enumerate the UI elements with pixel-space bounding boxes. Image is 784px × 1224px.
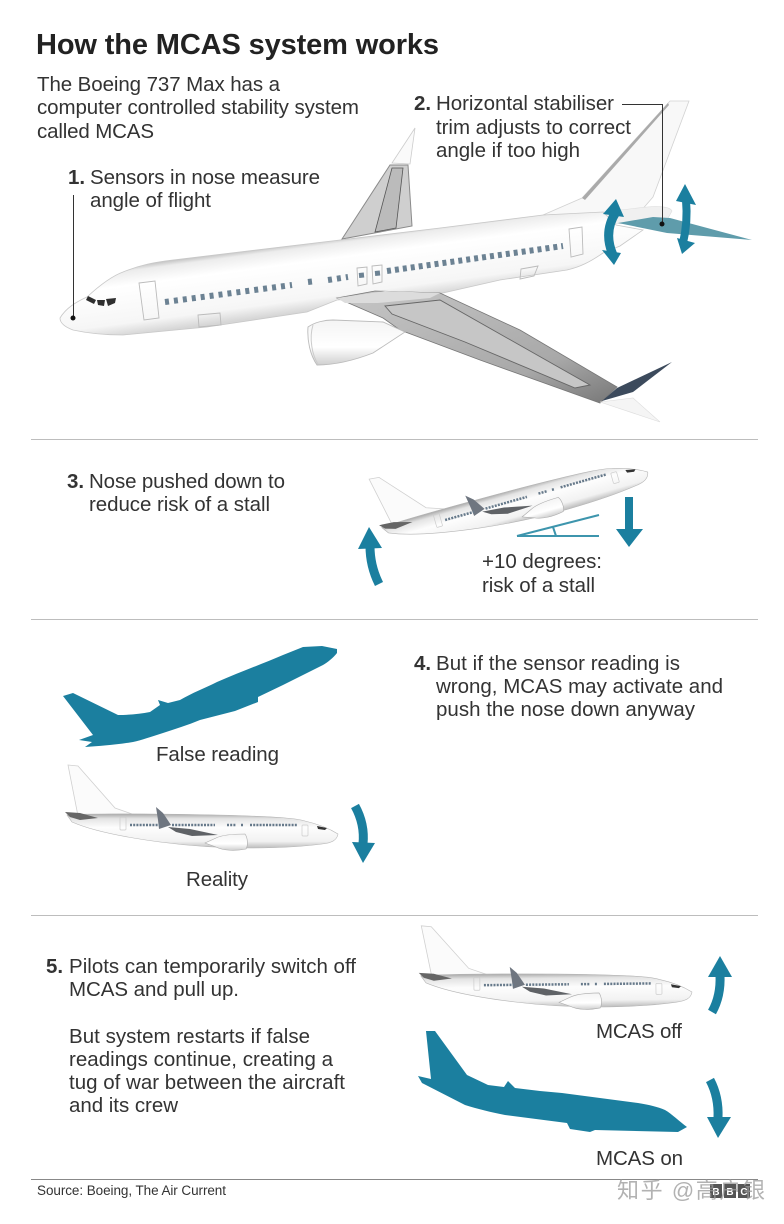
tail cone upper (603, 207, 672, 224)
winglet (600, 362, 672, 422)
step 3 text: reduce risk of a stall (89, 493, 270, 516)
nose-up aircraft (366, 406, 652, 562)
step 3 text: Nose pushed down to (89, 470, 285, 493)
step 5 text: Pilots can temporarily switch off (69, 955, 356, 978)
reality aircraft (65, 765, 338, 850)
engine (308, 320, 405, 365)
callout 2 text: angle if too high (436, 139, 580, 162)
step 3 text: 3. (67, 470, 84, 493)
far wing (342, 128, 415, 239)
divider (31, 438, 758, 440)
step 5 text: MCAS and pull up. (69, 978, 239, 1001)
main aircraft illustration (60, 101, 752, 422)
callout 2 text: trim adjusts to correct (436, 116, 631, 139)
reality label: Reality (186, 868, 249, 891)
false reading silhouette (63, 646, 337, 747)
callout 1 text: angle of flight (90, 189, 211, 212)
fuselage (60, 212, 643, 335)
horizontal stabiliser, teal (618, 217, 752, 240)
near wing (337, 291, 617, 403)
false reading label: False reading (156, 743, 279, 766)
leader line to nose sensor (70, 195, 76, 320)
MCAS on label: MCAS on (596, 1147, 683, 1170)
step 4 text (414, 652, 723, 721)
MCAS on silhouette (418, 1031, 687, 1132)
BBC logo: B (726, 1187, 734, 1198)
windows (165, 246, 563, 302)
intro text (37, 73, 359, 143)
callout 1 text: 1. (68, 166, 85, 189)
step 4 text: push the nose down anyway (436, 698, 696, 721)
leader line to stabiliser (622, 104, 664, 226)
arrow: tail up (358, 527, 382, 584)
callout 2 text: Horizontal stabiliser (436, 92, 614, 115)
step 4 text: 4. (414, 652, 431, 675)
angle label: risk of a stall (482, 574, 595, 597)
step 3 text (67, 470, 285, 516)
arrow: nose down (616, 497, 643, 547)
cockpit windows (86, 296, 116, 306)
MCAS off label: MCAS off (596, 1020, 682, 1043)
source: Source: Boeing, The Air Current (37, 1183, 226, 1198)
step 4 text: wrong, MCAS may activate and (435, 675, 723, 698)
step 5 text: But system restarts if false (69, 1025, 310, 1048)
step 5 text: 5. (46, 955, 63, 978)
arrow: MCAS on nose down (707, 1080, 731, 1138)
double arrow: stabiliser movement (676, 184, 696, 254)
angle marker (517, 515, 599, 536)
callout 2 text: 2. (414, 92, 431, 115)
footer rule (31, 1178, 758, 1180)
step 4 text: But if the sensor reading is (436, 652, 680, 675)
angle label (482, 550, 602, 597)
callout 1 text: Sensors in nose measure (90, 166, 320, 189)
BBC logo: C (740, 1187, 748, 1198)
intro text: computer controlled stability system (37, 96, 359, 119)
arrow: reality nose down (352, 806, 375, 863)
step 5 text: tug of war between the aircraft (69, 1071, 345, 1094)
step 5 text: and its crew (69, 1094, 178, 1117)
step 5 text (46, 955, 356, 1117)
BBC logo: B (712, 1187, 720, 1198)
callout 1 text (68, 166, 320, 212)
divider (31, 914, 758, 916)
MCAS off aircraft (418, 923, 692, 1011)
doors and panels (139, 227, 583, 327)
watermark: 知乎 @高户银 (617, 1178, 765, 1203)
divider (31, 618, 758, 620)
arrow: MCAS off nose up (708, 956, 732, 1012)
intro text: called MCAS (37, 120, 154, 143)
callout 2 text (414, 92, 631, 162)
angle label: +10 degrees: (482, 550, 602, 573)
BBC logo (710, 1184, 750, 1198)
title: How the MCAS system works (36, 29, 439, 61)
tail fin (543, 101, 689, 215)
step 5 text: readings continue, creating a (69, 1048, 334, 1071)
intro text: The Boeing 737 Max has a (37, 73, 281, 96)
double arrow: fuselage pitch (602, 199, 624, 265)
